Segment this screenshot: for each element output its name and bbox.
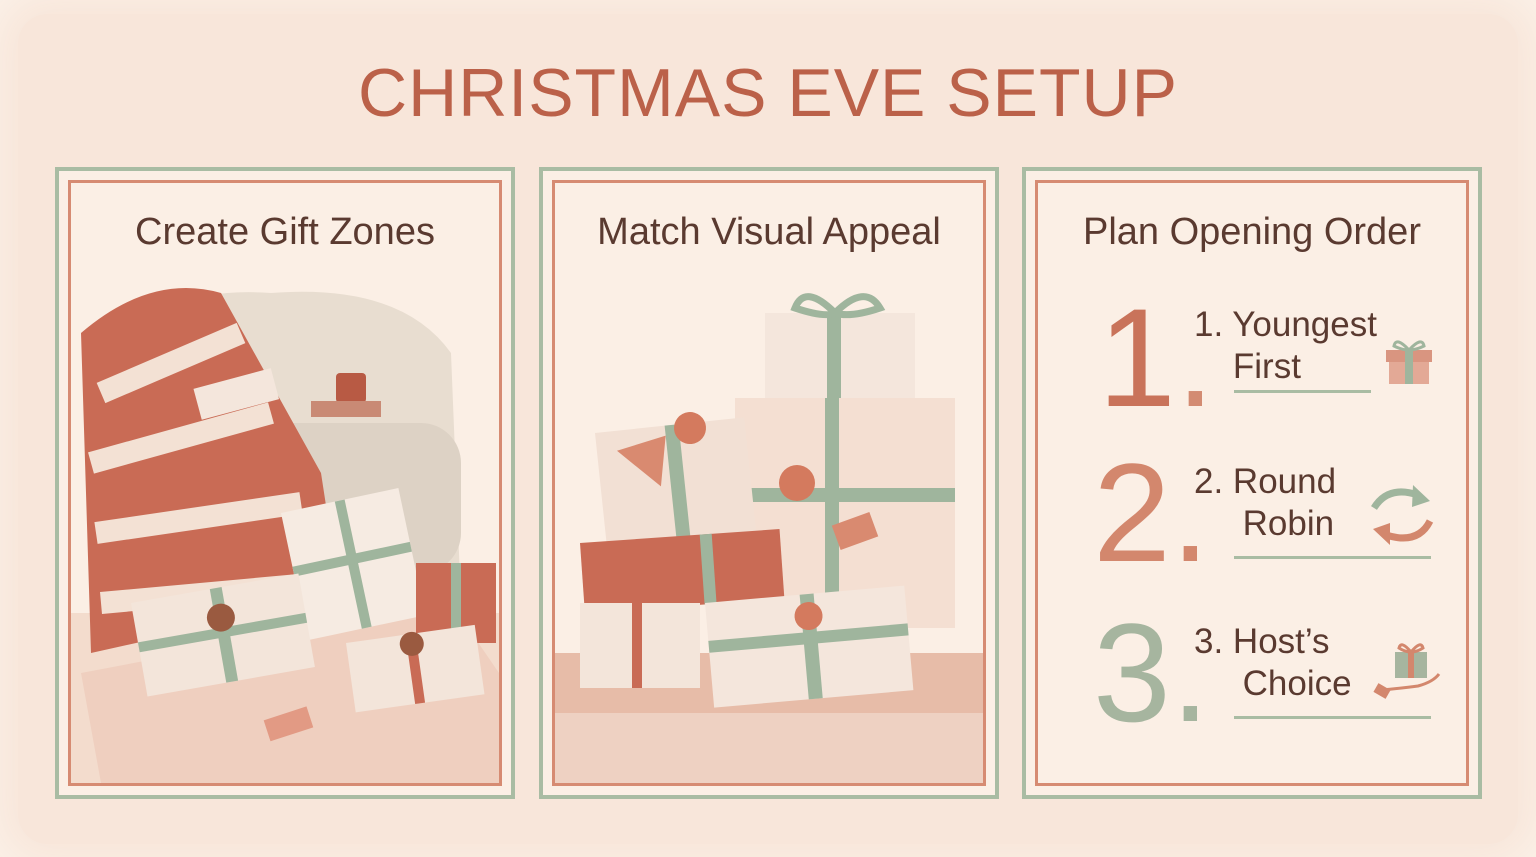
label: round robin: Robin: [1243, 504, 1334, 543]
label: youngest first: First: [1233, 347, 1301, 386]
label: round robin: 2. Round: [1194, 462, 1336, 501]
heading: match visual appeal: Match Visual Appeal: [597, 211, 941, 253]
illustration: armchair with blanket and gifts: [71, 288, 499, 783]
number 1: 1.: [1098, 279, 1215, 436]
label: round robin: [1194, 462, 1336, 543]
label: host's choice: [1194, 622, 1352, 703]
heading: plan opening order: Plan Opening Order: [1083, 211, 1421, 253]
title: CHRISTMAS EVE SETUP: [358, 55, 1178, 131]
panel: plan opening order: [1022, 167, 1482, 799]
icon: hand with gift: [1374, 643, 1440, 699]
illustration: stacked wrapped gifts: [555, 293, 983, 783]
step 1: [1098, 279, 1432, 436]
label: youngest first: 1. Youngest: [1194, 305, 1377, 344]
number 2: 2.: [1093, 434, 1210, 591]
icon: gift: [1386, 340, 1432, 384]
number 3: 3.: [1093, 594, 1210, 751]
step 2: [1093, 434, 1433, 591]
icon: cycle arrows: [1371, 485, 1433, 545]
panel: match visual appeal: [539, 167, 999, 799]
panel: create gift zones: [55, 167, 515, 799]
label: host's choice: Choice: [1243, 664, 1352, 703]
heading: create gift zones: Create Gift Zones: [135, 211, 435, 253]
label: host's choice: 3. Host’s: [1194, 622, 1330, 661]
step 3: [1093, 594, 1440, 751]
label: youngest first: [1194, 305, 1377, 386]
